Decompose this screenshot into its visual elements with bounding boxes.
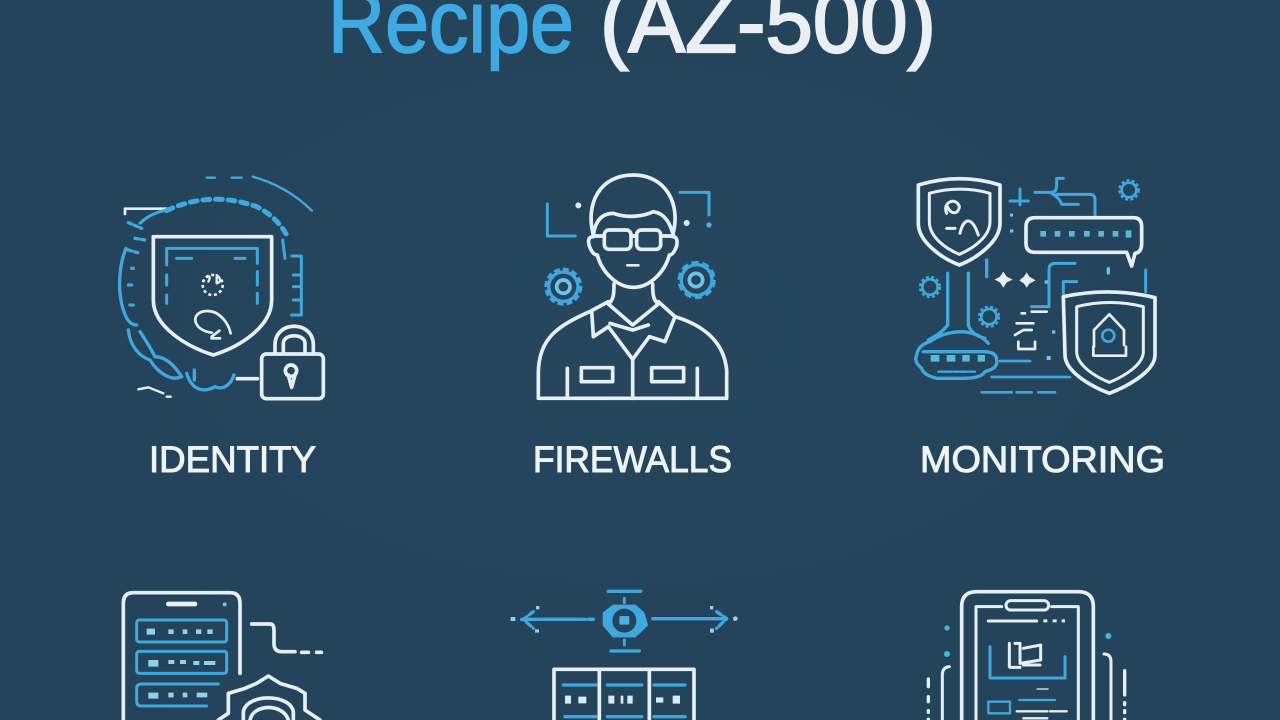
left shield	[918, 179, 1000, 265]
icon: database server with gear	[123, 593, 321, 720]
title	[328, 0, 936, 71]
rule table	[554, 669, 694, 720]
central gear	[604, 598, 647, 645]
sparkles	[995, 272, 1036, 288]
icon: network firewall with arrows and rule table	[511, 591, 738, 720]
icon: compliance tablet dashboard	[928, 592, 1125, 720]
label: monitoring: MONITORING	[920, 439, 1165, 480]
icon: monitoring network of shields	[916, 178, 1155, 393]
small gears	[920, 180, 1139, 327]
speech bubble	[1026, 218, 1142, 266]
icon: firewalls engineer with glasses	[538, 175, 727, 398]
gears	[546, 262, 715, 304]
label: firewalls: FIREWALLS	[533, 439, 732, 480]
shield glyph	[195, 275, 231, 338]
server	[916, 332, 997, 378]
padlock	[262, 326, 323, 399]
icon: identity shield with padlock	[120, 177, 323, 399]
right shield	[1063, 292, 1155, 393]
label: identity: IDENTITY	[149, 439, 316, 480]
